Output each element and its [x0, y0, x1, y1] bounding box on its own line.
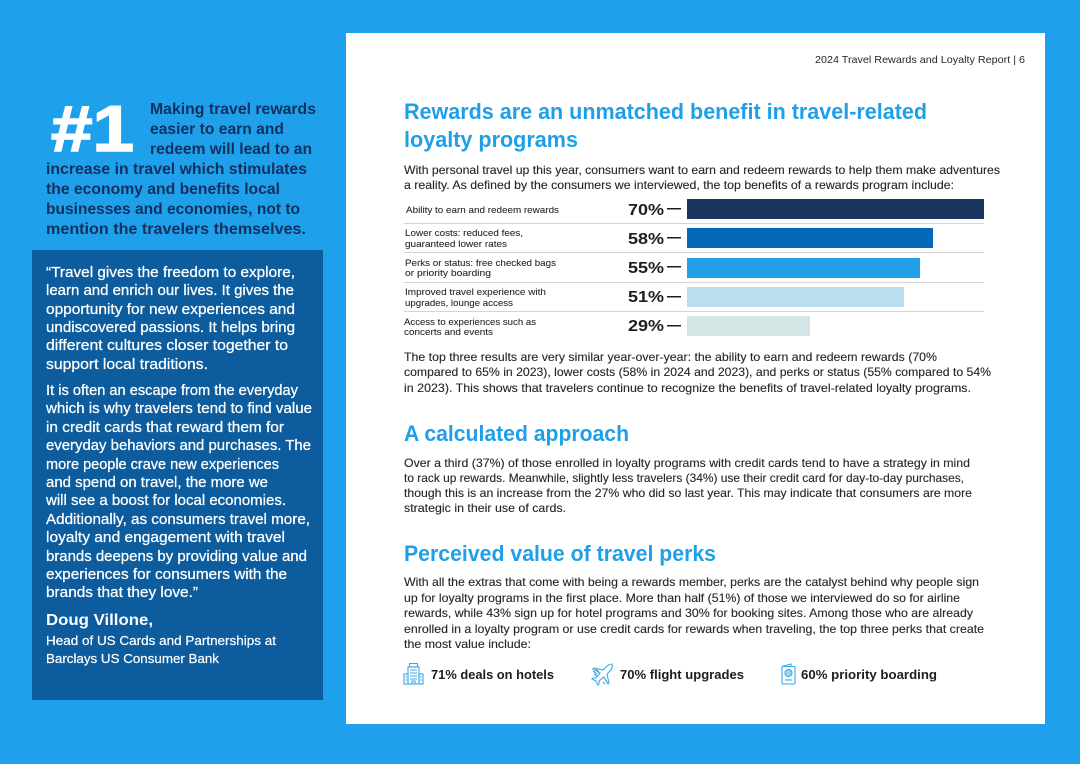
quote text: undiscovered passions. It helps bring	[46, 320, 295, 336]
page header: 2024 Travel Rewards and Loyalty Report | 6	[815, 54, 1025, 66]
quote text: which is why travelers tend to find value	[45, 401, 312, 417]
row: 58%: guaranteed lower rates	[405, 239, 507, 249]
quote text: opportunity for new experiences and	[46, 302, 295, 318]
row: 70%: 70%	[628, 202, 664, 219]
heading: rewards: loyalty programs	[404, 127, 578, 152]
lead statement: easier to earn and	[150, 121, 284, 138]
row: 29%	[404, 316, 810, 337]
quote attribution: Doug Villone,	[46, 612, 153, 629]
calculated approach text: though this is an increase from the 27% who did so last year. This may indicate that consumers are more	[404, 486, 972, 500]
row: 55%: 55%	[628, 260, 664, 277]
heading: rewards	[404, 99, 927, 152]
lead statement: businesses and economies, not to	[46, 201, 300, 218]
quote attribution	[46, 612, 277, 666]
calculated approach text: to rack up rewards. Meanwhile, slightly less travelers (34%) use their credit card for day-to-day purchases,	[404, 471, 964, 485]
quote text: loyalty and engagement with travel	[46, 530, 285, 546]
row: 58%: Lower costs: reduced fees,	[405, 228, 523, 238]
bar chart: top benefits	[404, 199, 984, 337]
quote text	[45, 265, 312, 601]
intro text: With personal travel up this year, consumers want to earn and redeem rewards to help them make adventures	[404, 163, 1000, 177]
row: 51%: Improved travel experience with	[405, 287, 546, 297]
quote text: different cultures closer together to	[46, 338, 288, 354]
perk: priority boarding: 60% priority boarding	[801, 667, 937, 682]
year-over-year text: compared to 65% in 2023), lower costs (58% in 2024 and 2023), and perks or status (55% compared to 54%	[404, 365, 992, 379]
perk: flight upgrades: 70% flight upgrades	[620, 667, 744, 682]
intro text	[404, 163, 1000, 192]
quote text: It is often an escape from the everyday	[46, 383, 299, 399]
row: 55%: or priority boarding	[405, 268, 491, 278]
quote text: and spend on travel, the more we	[46, 475, 268, 491]
row: 58%	[405, 228, 933, 249]
row: 51%	[405, 287, 904, 308]
icon: airplane	[592, 664, 612, 685]
quote text: learn and enrich our lives. It gives the	[46, 283, 294, 299]
row: 29%: Access to experiences such as	[404, 317, 536, 327]
quote text: more people crave new experiences	[46, 457, 279, 473]
perceived value text: up for loyalty programs in the first place. More than half (51%) of those we interviewed do so for airline	[404, 591, 960, 605]
perceived value text: With all the extras that come with being a rewards member, perks are the catalyst behind why people sign	[404, 575, 979, 589]
quote text: support local traditions.	[46, 357, 208, 373]
lead statement: the economy and benefits local	[46, 181, 280, 198]
year-over-year text: in 2023). This shows that travelers continue to recognize the benefits of travel-related loyalty programs.	[404, 381, 971, 395]
row: 51%: upgrades, lounge access	[405, 298, 513, 308]
calculated approach text: Over a third (37%) of those enrolled in loyalty programs with credit cards tend to have a strategy in mind	[404, 456, 970, 470]
year-over-year text	[404, 350, 992, 395]
big number: #1: #1	[51, 92, 134, 165]
quote text: will see a boost for local economies.	[45, 493, 286, 509]
quote attribution: Barclays US Consumer Bank	[46, 652, 220, 666]
row: 58%: 58%	[628, 231, 664, 248]
icon: hotel building	[404, 664, 423, 684]
lead statement: mention the travelers themselves.	[46, 221, 306, 238]
perk: priority boarding	[782, 664, 937, 684]
row: 29%: 29%	[628, 318, 664, 335]
calculated approach text: strategic in their use of cards.	[404, 501, 566, 515]
quote text: Additionally, as consumers travel more,	[46, 512, 310, 528]
lead statement	[46, 101, 316, 238]
quote text: experiences for consumers with the	[46, 567, 287, 583]
quote text: in credit cards that reward them for	[46, 420, 284, 436]
year-over-year text: The top three results are very similar year-over-year: the ability to earn and redeem rewards (70%	[404, 350, 938, 364]
lead statement: redeem will lead to an	[150, 141, 312, 158]
row: 55%: Perks or status: free checked bags	[405, 258, 556, 268]
quote text: brands deepens by providing value and	[46, 549, 307, 565]
lead statement: Making travel rewards	[150, 101, 316, 118]
perceived value text: the most value include:	[404, 637, 531, 651]
quote text: brands that they love.”	[46, 585, 198, 601]
row: 55%	[405, 258, 920, 278]
perk: deals on hotels	[404, 664, 554, 684]
quote text: “Travel gives the freedom to explore,	[46, 265, 295, 281]
perceived value text: enrolled in a loyalty program or use credit cards for rewards when traveling, the top three perks that create	[404, 622, 984, 636]
panel: executive quote	[32, 250, 323, 700]
perceived value text: rewards, while 43% sign up for hotel programs and 30% for booking sites. Among those who are already	[404, 606, 973, 620]
lead statement: increase in travel which stimulates	[46, 161, 307, 178]
icon: passport	[782, 664, 795, 684]
quote attribution: Head of US Cards and Partnerships at	[46, 634, 277, 648]
perk: deals on hotels: 71% deals on hotels	[431, 667, 554, 682]
heading: rewards: Rewards are an unmatched benefit in travel-related	[404, 99, 927, 124]
quote text: everyday behaviors and purchases. The	[46, 438, 311, 454]
row: 70%: Ability to earn and redeem rewards	[406, 205, 559, 215]
heading: perceived value: Perceived value of travel perks	[404, 541, 716, 566]
row: 70%	[406, 199, 984, 219]
row: 29%: concerts and events	[404, 327, 493, 337]
perk: flight upgrades	[592, 664, 744, 685]
row: 51%: 51%	[628, 289, 664, 306]
panel: main report page	[346, 33, 1045, 724]
intro text: a reality. As defined by the consumers we interviewed, the top benefits of a rewards program include:	[404, 178, 954, 192]
heading: a calculated approach: A calculated approach	[404, 421, 629, 446]
calculated approach text	[404, 456, 972, 515]
perceived value text	[404, 575, 984, 651]
